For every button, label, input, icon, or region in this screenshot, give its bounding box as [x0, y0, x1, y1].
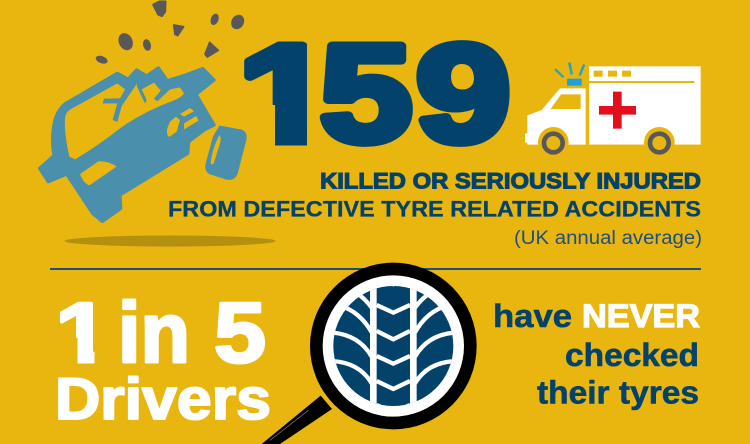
magnifier handle	[262, 396, 332, 444]
text: from defective tyre related accidents: FROM DEFECTIVE TYRE RELATED ACCIDENTS	[168, 196, 701, 222]
text: 1 in 5	[60, 298, 266, 364]
text: their tyres: their tyres	[537, 374, 699, 410]
heading: 159: 9	[416, 16, 510, 170]
icon: crashed car	[40, 68, 246, 221]
text: 1 in 5: in	[118, 286, 190, 381]
tyre tread	[333, 286, 454, 406]
text: killed or seriously injured: KILLED OR SERIOUSLY INJURED	[320, 168, 701, 194]
icon: flying debris	[96, 1, 246, 64]
text: 1 in 5: 5	[214, 286, 266, 381]
text: checked: checked	[565, 337, 699, 373]
heading: 159	[244, 40, 510, 147]
ambulance box	[589, 66, 701, 145]
icon: ambulance	[525, 62, 701, 158]
icon: magnifying glass with tyre tread	[262, 263, 477, 444]
text: UK annual average: (UK annual average)	[514, 228, 702, 249]
text: have NEVER: NEVER	[582, 298, 700, 334]
icon: car shadow	[64, 236, 276, 246]
text: have NEVER	[493, 298, 700, 334]
heading: 159: 1	[238, 17, 334, 171]
text: Drivers: Drivers	[55, 367, 271, 432]
text: 1 in 5: 1	[55, 286, 109, 381]
heading: 159: 5	[320, 17, 412, 171]
text: have NEVER: have	[493, 298, 572, 334]
